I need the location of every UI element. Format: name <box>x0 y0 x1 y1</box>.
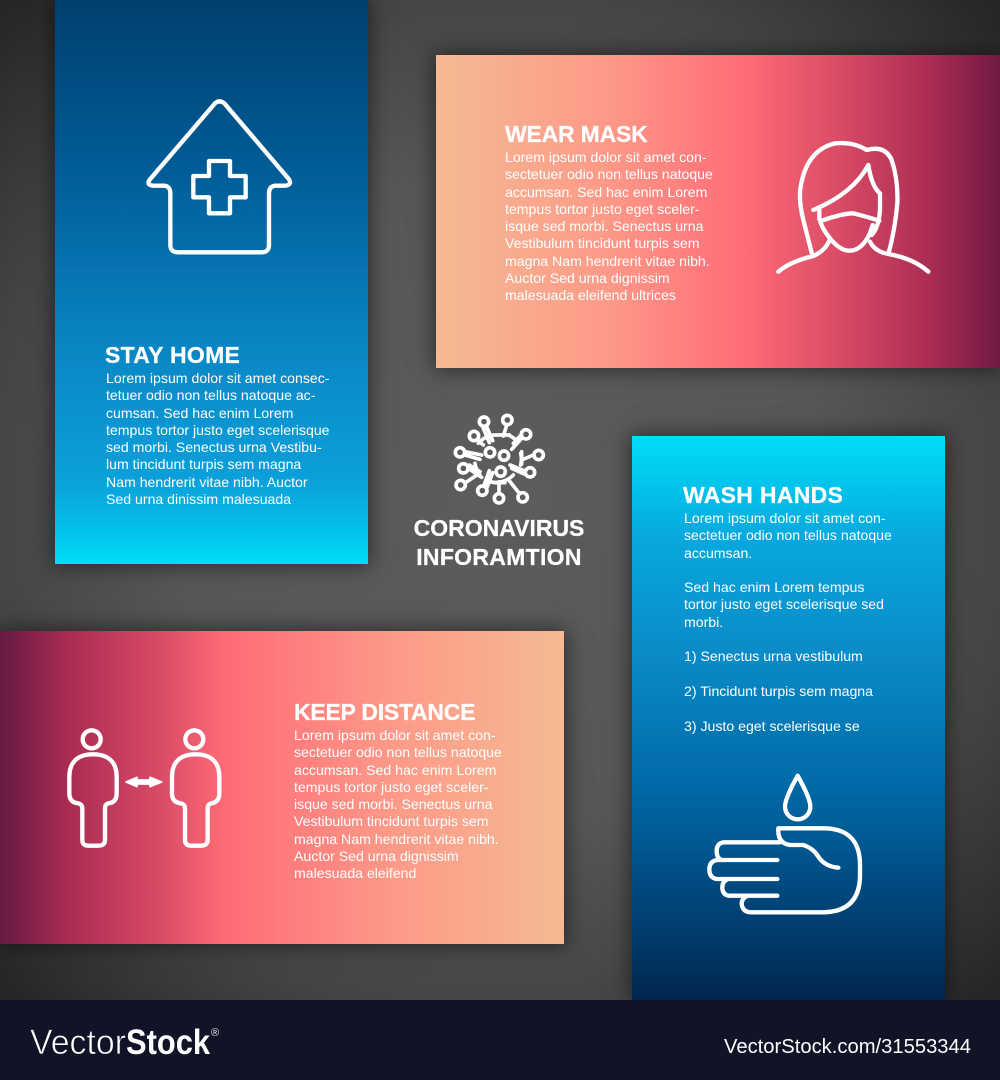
heading: wash hands: WASH HANDS <box>683 482 843 508</box>
text: keep distance body: Auctor Sed urna dignissim <box>294 848 459 864</box>
text: keep distance body: malesuada eleifend <box>294 865 416 881</box>
icon: woman wearing a face mask <box>776 140 930 274</box>
text: wash hands body: 1) Senectus urna vestibulum <box>684 648 863 664</box>
text: wash hands body: Sed hac enim Lorem tempus <box>684 579 864 595</box>
text: wear mask body: isque sed morbi. Senectus urna <box>505 218 703 234</box>
text: wash hands body: 3) Justo eget scelerisque se <box>684 718 860 734</box>
logo: vectorstock: Stock <box>126 1023 210 1062</box>
text: wear mask body: Lorem ipsum dolor sit amet con- <box>505 149 707 165</box>
text: wear mask body: Auctor Sed urna dignissim <box>505 270 670 286</box>
text: wear mask body <box>505 149 713 303</box>
text: stay home body: cumsan. Sed hac enim Lorem <box>106 405 293 421</box>
text: keep distance body: accumsan. Sed hac enim Lorem <box>294 762 496 778</box>
text: wash hands body: Lorem ipsum dolor sit amet con- <box>684 510 886 526</box>
text: keep distance body <box>294 727 502 881</box>
panel: keep distance <box>0 631 564 944</box>
text: wear mask body: sectetuer odio non tellus natoque <box>505 166 713 182</box>
heading: wear mask: WEAR MASK <box>505 121 648 147</box>
text: keep distance body: Lorem ipsum dolor sit amet con- <box>294 727 496 743</box>
text: stay home body <box>106 370 330 507</box>
panel: wash hands <box>632 436 945 1000</box>
text: wash hands body: 2) Tincidunt turpis sem magna <box>684 683 873 699</box>
text: wash hands body: tortor justo eget scelerisque sed <box>684 596 884 612</box>
icon: hand under a water drop <box>707 774 862 914</box>
text: wear mask body: malesuada eleifend ultrices <box>505 287 676 303</box>
text: wash hands body <box>684 510 892 734</box>
text: stay home body: tempus tortor justo eget scelerisque <box>106 422 330 438</box>
text: wash hands body: accumsan. <box>684 545 752 561</box>
text: keep distance body: tempus tortor justo eget sceler- <box>294 779 488 795</box>
panel: stay home <box>55 0 368 564</box>
logo: vectorstock: ® <box>211 1027 219 1039</box>
footer: watermark bar <box>0 1000 1000 1080</box>
text: stay home body: lum tincidunt turpis sem magna <box>106 456 301 472</box>
text: wear mask body: magna Nam hendrerit vitae nibh. <box>505 253 710 269</box>
text: keep distance body: magna Nam hendrerit vitae nibh. <box>294 831 499 847</box>
logo: vectorstock <box>30 1023 219 1062</box>
text: keep distance body: sectetuer odio non tellus natoque <box>294 744 502 760</box>
text: wear mask body: tempus tortor justo eget sceler- <box>505 201 699 217</box>
text: stay home body: Nam hendrerit vitae nibh. Auctor <box>106 474 308 490</box>
text: stay home body: sed morbi. Senectus urna Vestibu- <box>106 439 322 455</box>
logo: vectorstock: Vector <box>30 1023 126 1062</box>
text: image id: VectorStock.com/31553344 <box>724 1036 971 1058</box>
title: coronavirus information <box>414 515 584 570</box>
title: coronavirus information: CORONAVIRUS <box>414 515 584 541</box>
text: stay home body: tetuer odio non tellus natoque ac- <box>106 387 315 403</box>
heading: stay home: STAY HOME <box>105 342 240 368</box>
icon: two people with a distance arrow <box>67 728 222 848</box>
icon: house with medical cross <box>146 99 292 254</box>
title: coronavirus information: INFORAMTION <box>416 544 582 570</box>
text: stay home body: Sed urna dinissim malesuada <box>106 491 291 507</box>
text: keep distance body: isque sed morbi. Senectus urna <box>294 796 492 812</box>
text: wear mask body: accumsan. Sed hac enim Lorem <box>505 184 707 200</box>
text: keep distance body: Vestibulum tincidunt turpis sem <box>294 813 488 829</box>
heading: keep distance: KEEP DISTANCE <box>294 699 475 725</box>
text: stay home body: Lorem ipsum dolor sit amet consec- <box>106 370 329 386</box>
text: wash hands body: sectetuer odio non tellus natoque <box>684 527 892 543</box>
text: wash hands body: morbi. <box>684 614 723 630</box>
icon: coronavirus <box>454 414 546 505</box>
panel: wear mask <box>436 55 1000 368</box>
text: wear mask body: Vestibulum tincidunt turpis sem <box>505 235 700 251</box>
